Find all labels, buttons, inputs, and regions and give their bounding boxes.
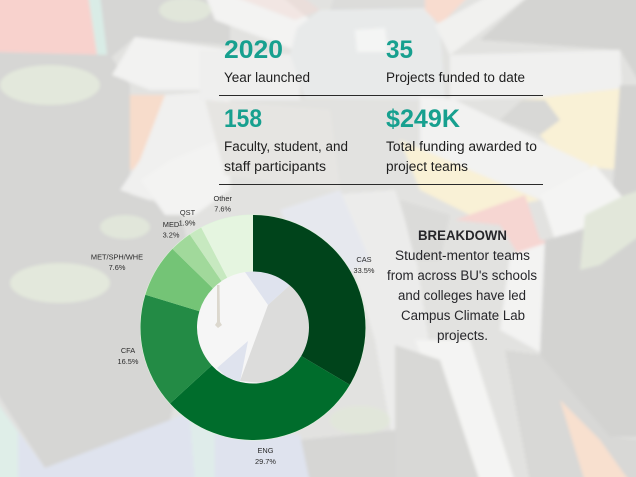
stat: total funding <box>386 105 537 174</box>
stat: total funding: $249K <box>386 105 460 133</box>
chart labels: 29.7% <box>255 457 276 466</box>
chart labels: CFA <box>121 346 135 355</box>
stat: projects funded: 35 <box>386 36 413 64</box>
stat: year launched: 2020 <box>224 36 283 64</box>
chart labels: 7.6% <box>109 263 126 272</box>
segment: MET/SPH/WHE <box>145 249 213 311</box>
chart labels: ENG <box>257 446 274 455</box>
stat: participants: 158 <box>224 105 262 133</box>
breakdown text block <box>387 228 537 343</box>
stat: year launched: Year launched <box>224 70 310 85</box>
breakdown text block: and colleges have led <box>398 288 526 303</box>
stat: participants: Faculty, student, and <box>224 139 348 154</box>
breakdown text block: from across BU's schools <box>387 268 537 283</box>
chart labels: 3.2% <box>163 230 180 240</box>
stat: participants <box>224 105 348 174</box>
breakdown text block: Campus Climate Lab <box>401 308 525 323</box>
chart labels: Other <box>213 194 232 203</box>
stat: total funding: Total funding awarded to <box>386 139 537 154</box>
stat: participants: staff participants <box>224 159 326 174</box>
segment: QST <box>190 228 227 281</box>
segment: MED <box>172 234 222 288</box>
chart labels: 1.9% <box>179 218 196 228</box>
see-through donut hole <box>196 268 338 386</box>
breakdown text block: Student-mentor teams <box>395 248 530 263</box>
segment: ENG <box>170 356 350 440</box>
stat: total funding: project teams <box>386 159 468 174</box>
segment: CFA <box>141 295 212 404</box>
stat: projects funded <box>386 36 525 85</box>
breakdown text block: BREAKDOWN <box>418 228 507 243</box>
stat: projects funded: Projects funded to date <box>386 70 525 85</box>
chart labels: 7.6% <box>214 204 232 214</box>
chart labels: MET/SPH/WHE <box>91 252 143 262</box>
chart labels: 33.5% <box>354 266 375 275</box>
stat: year launched <box>224 36 310 85</box>
chart labels <box>91 194 375 466</box>
chart labels: QST <box>180 208 196 217</box>
breakdown text block: projects. <box>437 328 488 343</box>
chart labels: MED <box>163 220 179 229</box>
chart labels: 16.5% <box>118 357 139 366</box>
chart labels: CAS <box>356 255 372 264</box>
segment: CAS <box>253 215 365 385</box>
segment: Other <box>201 215 253 278</box>
donut chart <box>140 214 366 440</box>
